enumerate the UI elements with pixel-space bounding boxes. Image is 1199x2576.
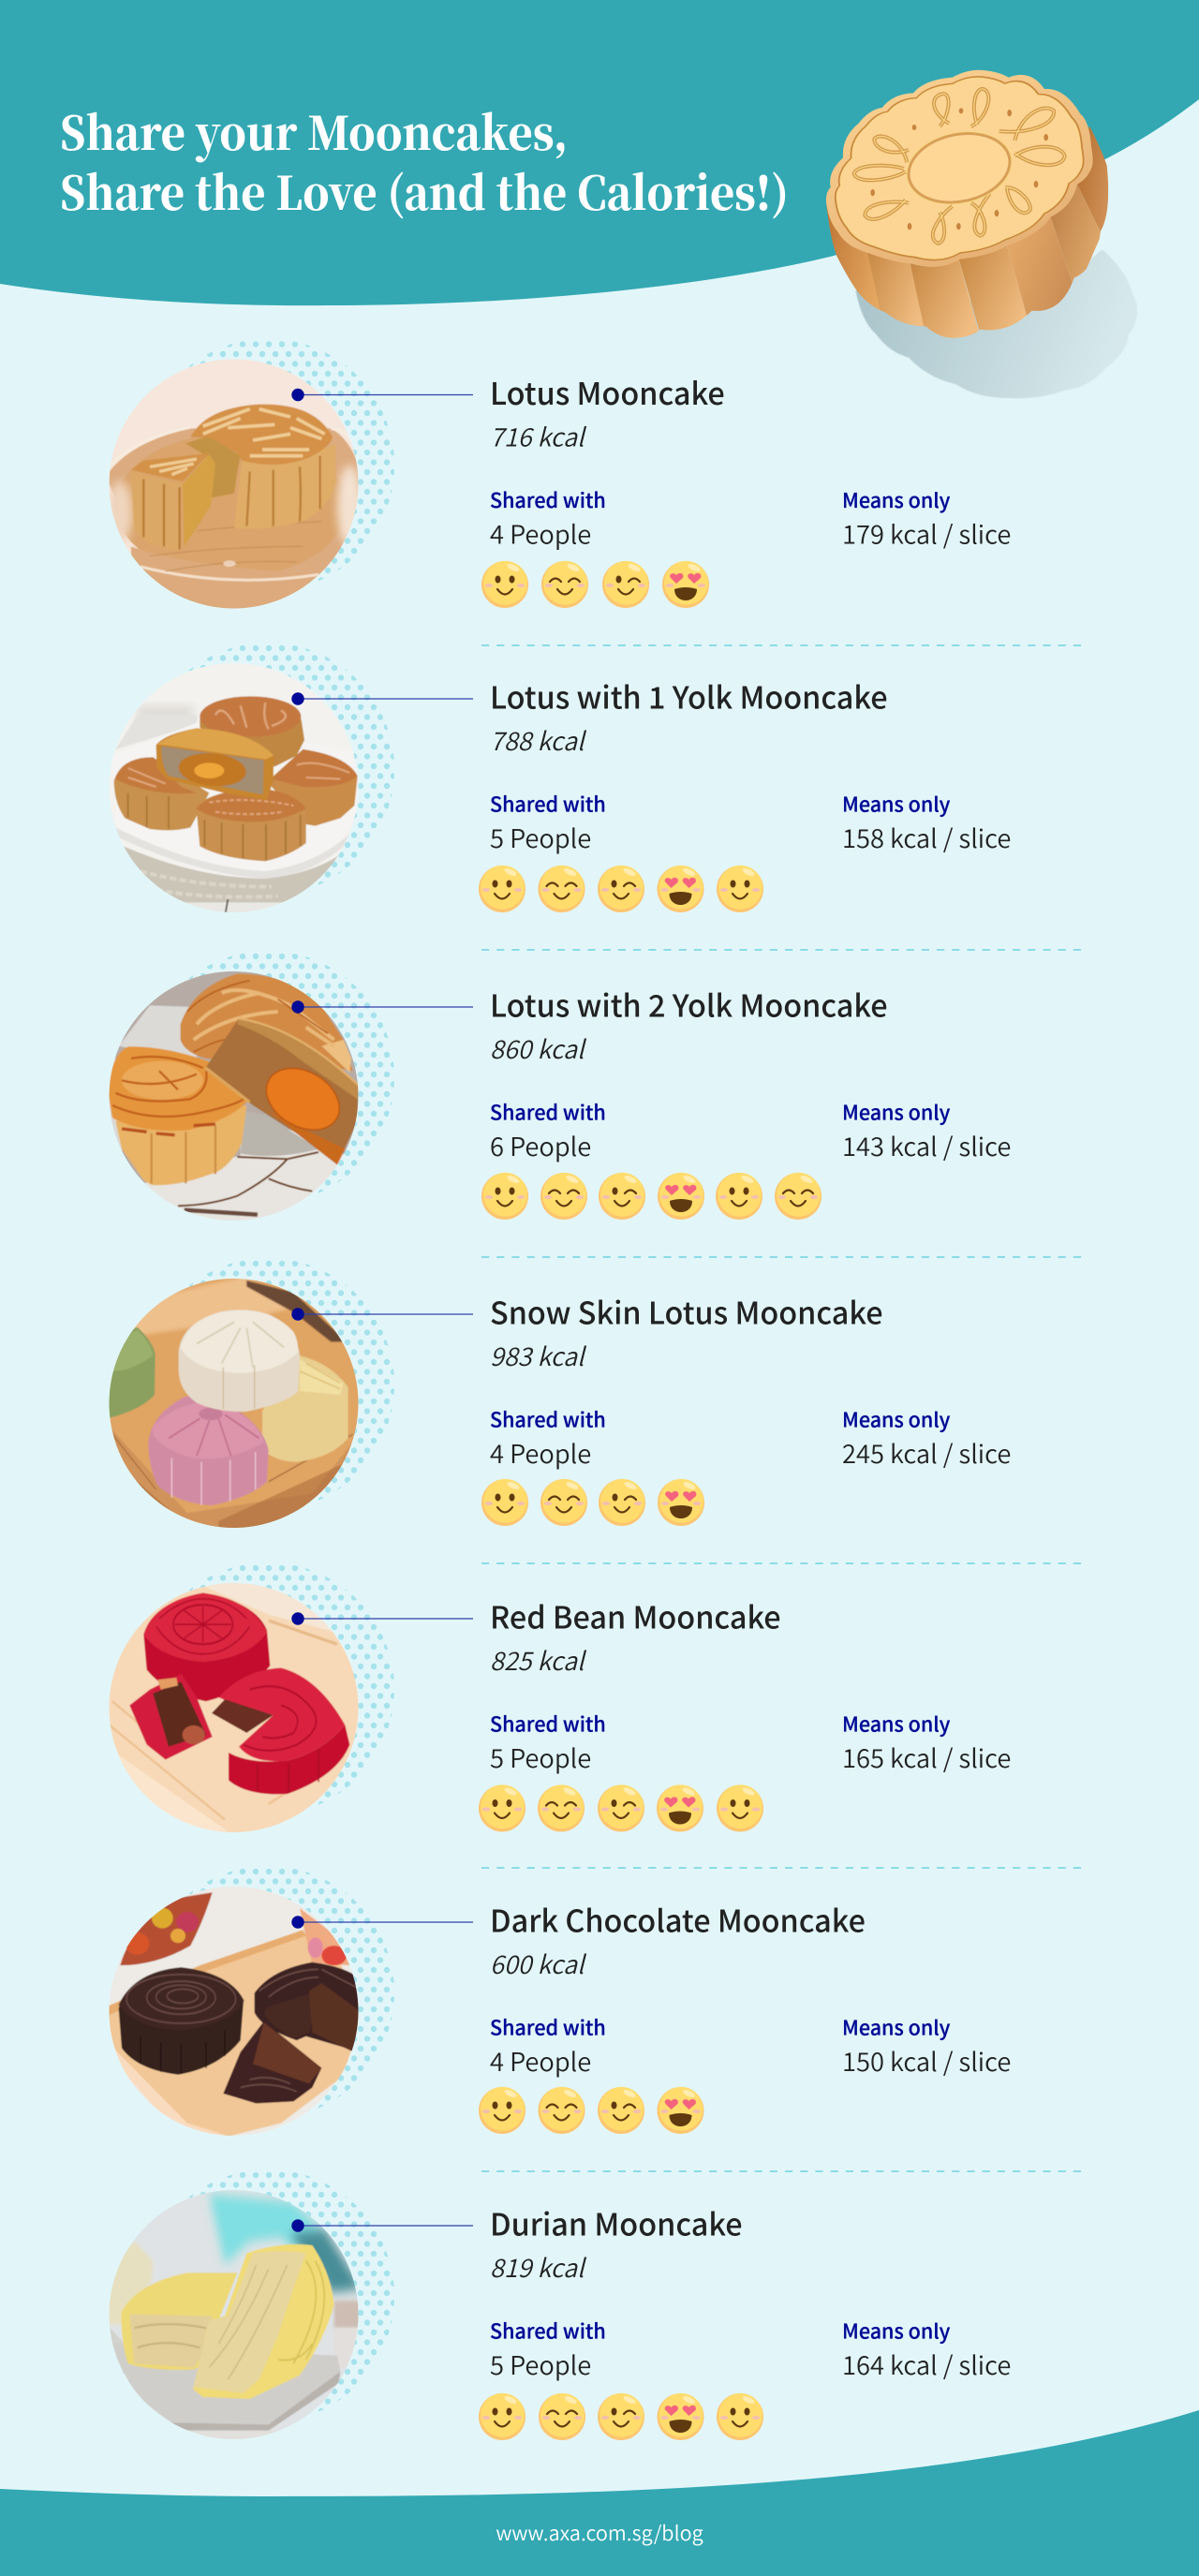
header band xyxy=(0,0,1199,305)
item text: 6 People xyxy=(490,1126,591,1163)
item text xyxy=(490,982,1011,1163)
item text: 165 kcal / slice xyxy=(842,1738,1011,1775)
item text: Shared with xyxy=(490,2012,606,2042)
footer band xyxy=(0,2410,1199,2576)
item text: Lotus with 1 Yolk Mooncake xyxy=(490,674,888,718)
item text: 4 People xyxy=(490,513,591,551)
item text: 245 kcal / slice xyxy=(842,1433,1011,1471)
item text: 179 kcal / slice xyxy=(842,513,1011,551)
photo: lotus with 2 yolk xyxy=(109,971,358,1221)
item text: Shared with xyxy=(490,2316,606,2346)
photo: durian xyxy=(109,2190,358,2439)
item text: 788 kcal xyxy=(490,721,587,758)
item text xyxy=(490,2201,1011,2382)
item text: Lotus Mooncake xyxy=(490,370,725,414)
item text: Means only xyxy=(842,485,951,514)
halftone circle xyxy=(141,1562,394,1815)
item text: 4 People xyxy=(490,2041,591,2079)
mooncake item 3 xyxy=(109,954,1010,1221)
item text: Shared with xyxy=(490,1709,606,1739)
connector dot and line xyxy=(291,1308,473,1321)
item text: 5 People xyxy=(490,818,591,855)
item text: Durian Mooncake xyxy=(490,2201,743,2244)
item text: Shared with xyxy=(490,1405,606,1433)
item text: Means only xyxy=(842,2316,951,2346)
item text: 825 kcal xyxy=(490,1641,587,1678)
icon: large mooncake illustration xyxy=(815,70,1137,398)
item text: Means only xyxy=(842,2012,951,2042)
mooncake item 6 xyxy=(94,1866,1011,2154)
photo: lotus with 1 yolk xyxy=(109,663,358,912)
connector dot and line xyxy=(291,692,473,705)
item text: 5 People xyxy=(490,2345,591,2382)
emoji people xyxy=(481,1479,704,1526)
item text: Lotus with 2 Yolk Mooncake xyxy=(490,982,888,1027)
emoji people xyxy=(479,2393,763,2440)
halftone circle xyxy=(141,643,394,896)
footer url: www.axa.com.sg/blog xyxy=(496,2518,703,2547)
emoji people xyxy=(479,1784,763,1832)
item text: Red Bean Mooncake xyxy=(490,1594,781,1637)
item text: 819 kcal xyxy=(490,2248,587,2285)
item text xyxy=(490,1594,1011,1775)
item text: 158 kcal / slice xyxy=(842,818,1011,855)
item text: 716 kcal xyxy=(490,418,587,453)
halftone circle xyxy=(141,1258,394,1511)
item text xyxy=(490,1898,1011,2079)
item text: Snow Skin Lotus Mooncake xyxy=(490,1289,883,1334)
mooncake item 4 xyxy=(109,1261,1010,1528)
photo: dark chocolate xyxy=(109,1887,358,2136)
item text: 4 People xyxy=(490,1433,591,1471)
emoji people xyxy=(481,1173,822,1220)
emoji people xyxy=(479,2087,704,2134)
item text: 164 kcal / slice xyxy=(842,2345,1011,2382)
mooncake item 1 xyxy=(103,339,1011,628)
item text: Shared with xyxy=(490,485,606,514)
item text: 983 kcal xyxy=(490,1337,587,1373)
connector dot and line xyxy=(291,389,473,401)
item text xyxy=(490,674,1011,855)
item text: 143 kcal / slice xyxy=(842,1126,1011,1163)
item text: 150 kcal / slice xyxy=(842,2041,1011,2079)
photo: red bean xyxy=(109,1583,358,1832)
title xyxy=(60,98,789,224)
item text: 5 People xyxy=(490,1738,591,1775)
title: Share your Mooncakes, xyxy=(60,98,568,164)
title: Share the Love (and the Calories!) xyxy=(60,158,789,224)
item text: 860 kcal xyxy=(490,1029,587,1066)
item text xyxy=(490,370,1011,551)
photo: lotus mooncake xyxy=(109,360,358,609)
photo: snow skin lotus xyxy=(109,1279,358,1528)
mooncake item 2 xyxy=(103,643,1011,937)
connector dot and line xyxy=(291,1916,473,1929)
item text: Means only xyxy=(842,1098,951,1126)
mooncake body xyxy=(815,125,1115,340)
mooncake shadow xyxy=(855,250,1137,398)
item text: 600 kcal xyxy=(490,1945,587,1981)
item text: Shared with xyxy=(490,789,606,819)
halftone circle xyxy=(141,2169,394,2422)
item text: Dark Chocolate Mooncake xyxy=(490,1898,866,1941)
emoji people xyxy=(481,561,709,608)
halftone circle xyxy=(141,339,394,592)
item text: Means only xyxy=(842,1405,951,1433)
connector dot and line xyxy=(291,1000,473,1014)
mooncake item 7 xyxy=(94,2169,1011,2462)
connector dot and line xyxy=(291,2219,473,2232)
connector dot and line xyxy=(291,1612,473,1625)
item text xyxy=(490,1289,1011,1471)
mooncake item 5 xyxy=(94,1562,1011,1851)
item text: Means only xyxy=(842,789,951,819)
item text: Shared with xyxy=(490,1098,606,1126)
item text: Means only xyxy=(842,1709,951,1739)
halftone circle xyxy=(141,951,394,1204)
halftone circle xyxy=(141,1866,394,2119)
emoji people xyxy=(479,866,763,912)
mooncake top face xyxy=(826,70,1093,267)
